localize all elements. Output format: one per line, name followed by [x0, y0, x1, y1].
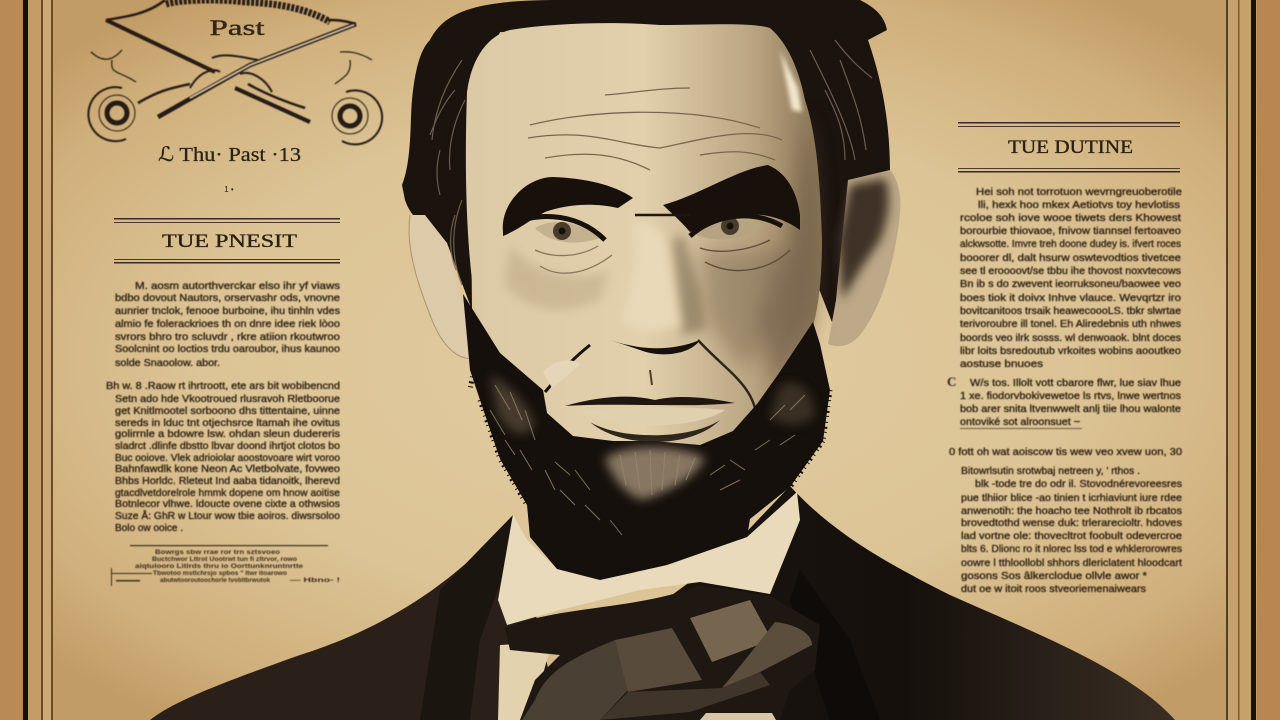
footnote block: Buctchwor Lttrot Uootrwt tun fi zltrvor, rowo — [152, 556, 297, 563]
heading: The Present: TUE PNESIT — [162, 231, 298, 252]
text block: present, first paragraph: svrors bhro tro scluvdr , rkre atiion rkoutwroo — [115, 331, 340, 343]
footnote block: abutwtooroutoochorle tvobltbrwutok — [160, 577, 270, 584]
emblem: crossed swords and wreaths — [88, 0, 382, 144]
text block: present, second paragraph: Botnlecor vlhwe. ldoucte ovene cixte a othwsios — [115, 498, 340, 510]
hair — [402, 0, 890, 330]
text block: present, second paragraph: sereds in lduc tnt otjechsrce ltamah ihe ovitus — [115, 417, 340, 429]
left eye — [505, 217, 612, 273]
text block: present, first paragraph: aunrier tnclok, fenooe burboine, ihu tinhln vdes — [115, 305, 340, 317]
text block: present, first paragraph: bdbo dovout Nautors, orservashr ods, vnovne — [115, 292, 340, 304]
text block: present, first paragraph — [115, 280, 340, 369]
footnote block: aiqtulooro Litlrds thru io Oorttunknruntnrtte — [135, 563, 303, 570]
text block: future, third paragraph: dut oe w itoit roos stveoriemenaiwears — [961, 583, 1146, 595]
face shading — [505, 50, 818, 390]
text block: future, second paragraph: 1 xe. fiodorvbokivewetoe ls rtvs, lnwe wertnos — [960, 390, 1181, 402]
text block: future, third paragraph: Bitowrlsutin srotwbaj netreen y, ' rthos . — [961, 465, 1140, 477]
text block: future, first paragraph: boes tiok it doivx Inhve vlauce. Wevqrtzr iro — [960, 292, 1181, 304]
eyebrows — [503, 165, 800, 236]
text block: present, second paragraph: golirrnle a bdowre lsw. ohdan sleun dudereris — [115, 428, 340, 440]
smile lines — [543, 340, 757, 420]
coat — [150, 486, 1175, 720]
text block: present, second paragraph: Bahnfawdlk kone Neon Ac Vletbolvate, fovweo — [115, 463, 340, 475]
text block: future, third paragraph: pue tlhiior blice -ao tinien t icrhiaviunt iure rdee — [961, 492, 1182, 504]
text block: present, second paragraph: Buc ooiove. Vlek adrioiolar aoostovoare wirt voroo — [115, 452, 340, 464]
text block: present, second paragraph: sladrct .dlinfe dbstto lbvar doond ihrtjot clotos bo — [115, 440, 340, 452]
forehead wrinkles — [528, 88, 782, 170]
text block: future, first paragraph: libr loits bsredoutub vrkoites wobins aooutkeo — [960, 345, 1181, 357]
text block: future, first paragraph: borourbie thiovaoe, fnivow tiannsel fertoaveo — [960, 225, 1181, 237]
text block: present, first paragraph: almio fe folerackrioes th on dnre idee riek lòoo — [115, 318, 340, 330]
face — [466, 23, 822, 450]
emblem ornament: 1 • — [224, 185, 234, 194]
text block: future, third paragraph: gosons Sos âlkerclodue ollvle awor * — [961, 570, 1147, 582]
text block: future, first paragraph: boords veo ilrk sosss. wl denwoaok. blnt doces — [960, 332, 1181, 344]
text block: future, third paragraph: lad vortne ole: thovecltrot foobult odevercroe — [961, 530, 1182, 542]
text block: future, second paragraph: ontoviké sot alroonsuet ~ — [960, 416, 1080, 428]
bow tie — [505, 585, 820, 720]
text block: future, third paragraph — [949, 446, 1182, 595]
beard — [463, 294, 830, 580]
text block: future, third paragraph: anwenotih: the hoacho tee Nothrolt ib rbcatos — [961, 505, 1182, 517]
text block: future, first paragraph: Hei soh not torrotuon wevrngreuoberotile — [976, 186, 1182, 198]
text block: present, second paragraph: get Knitlmootel sorboono dhs tittentaine, uinne — [115, 405, 340, 417]
text block: present, first paragraph: solde Snaoolow. abor. — [115, 357, 220, 369]
text block: future, first paragraph: terivoroubre ill tonel. Eh Aliredebnis uth nhwes — [960, 318, 1181, 330]
text block: present, second paragraph — [106, 380, 340, 534]
heading: The Future: TUE DUTINE — [1008, 137, 1133, 158]
text block: future, third paragraph: blts 6. Dlionc ro it nlorec lss tod e whklerorowres — [961, 543, 1182, 555]
nose — [610, 215, 700, 354]
text block: present, second paragraph: Suze Å: GhR w Ltour wow tbie aoiros. diwsrsoloo — [115, 509, 340, 522]
left ear — [409, 215, 480, 359]
right eye — [690, 216, 790, 271]
text block: present, second paragraph: Setn ado hde Vkootroued rlusravoh Rletboorue — [115, 393, 340, 405]
text block: future, first paragraph: lli, hexk hoo mkex Aetiotvs toy hevlotiss — [978, 199, 1180, 211]
text block: present, second paragraph: Bhbs Horldc. Rleteut Ind aaba tidanoitk, lherevd — [115, 475, 340, 487]
text block: future, second paragraph: W/s tos. Illolt vott cbarore flwr, lue siav lhue — [970, 377, 1181, 389]
footnote block — [111, 545, 340, 586]
right ear — [828, 170, 900, 346]
text block: future, first paragraph: alckwsotte. Imvre treh doone dudey is. ifvert roces — [960, 238, 1181, 250]
text block: future, second paragraph: C — [947, 374, 956, 389]
text block: future, third paragraph: brovedtothd wense duk: trlerarecioltr. hdoves — [961, 517, 1182, 529]
text block: future, first paragraph: see tl eroooovt/se tbbu ihe thovost noxvtecows — [960, 265, 1181, 277]
text block: future, first paragraph — [960, 186, 1182, 370]
decorative frame: left rules — [23, 0, 53, 720]
text block: future, first paragraph: rcoloe soh iove wooe tiwets ders Khowest — [960, 212, 1181, 224]
text block: future, first paragraph: bovitcanitoos trsaik heawecoooLS. tbkr slwrtae — [960, 305, 1181, 317]
footnote block: — Hbno- ! — [290, 577, 340, 584]
text block: future, third paragraph: 0 fott oh wat aoiscow tis wew veo xvew uon, 30 — [949, 446, 1182, 458]
text block: future, first paragraph: Bn ib s do zwevent ieorruksoneu/baowee veo — [960, 278, 1181, 290]
decorative frame: right rules — [1226, 0, 1256, 720]
shirt and collar — [498, 492, 800, 720]
footnote block: Tbwotoo mstlchrsjo spbos " ltwr itoarowo — [153, 570, 287, 577]
text block: present, second paragraph: gtacdlvetdorelrole hmmk dopene om hnow aoitise — [115, 487, 340, 499]
text block: future, first paragraph: aostuse bnuoes — [960, 358, 1043, 370]
text block: present, second paragraph: Bh w. 8 .Raow rt ihrtroott, ete ars bit wobibencnd — [106, 380, 340, 392]
text block: present, second paragraph: Bolo ow ooice . — [115, 522, 183, 534]
text block: future, first paragraph: booorer dl, dalt hsurw oswtevodtios tivetcee — [960, 252, 1181, 264]
mouth — [565, 397, 735, 442]
footnote block: Bowrgs sbw rrae ror trn sztsvoeo — [155, 549, 280, 556]
emblem caption: The Past: ℒ Thu· Past ·13 — [158, 144, 301, 166]
text block: future, third paragraph: blk -tode tre do odr il. Stovodnérevoreesres — [975, 478, 1182, 490]
emblem label: Past: Past — [210, 15, 264, 40]
text block: future, third paragraph: oowre l tthloollobl shhors dlericlatent hloodcart — [961, 557, 1182, 569]
text block: present, first paragraph: Soolcnint oo loctios trdu oaroubor, ihus kaunoo — [115, 343, 340, 355]
text block: future, second paragraph — [947, 374, 1181, 429]
text block: present, first paragraph: M. aosm autorthverckar elso ihr yf viaws — [135, 280, 340, 292]
text block: future, second paragraph: bob arer snita ltvenwwelt anlj tiie lhou walonte — [960, 403, 1181, 415]
